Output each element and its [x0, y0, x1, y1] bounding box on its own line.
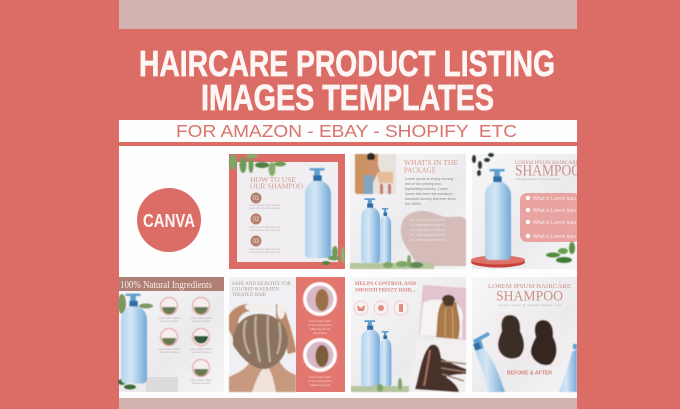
caption top: Lorem ipsum dolor — [309, 319, 331, 323]
photo: flowing hair — [414, 340, 466, 392]
ingredient captions: Lorem ipsum dolor — [158, 347, 180, 351]
heading — [488, 284, 571, 304]
blob text: 1x Lorem ipsum dolor sit — [410, 223, 445, 227]
leaves — [351, 378, 409, 392]
panel: how to use our shampoo — [229, 154, 345, 269]
bottom band — [119, 398, 577, 409]
caption top: adipiscing elit sed — [310, 327, 331, 331]
panel: safe and healthy — [229, 277, 345, 392]
photo — [355, 153, 396, 194]
heading: HOW TO USE — [250, 175, 296, 184]
bottle right — [559, 344, 577, 392]
panel: lorem ipsum shampoo: Lorem ipsum dolor sit amet consectetur — [515, 177, 561, 181]
caption top — [308, 319, 332, 335]
panel: lorem ipsum shampoo — [471, 153, 581, 269]
heading: SHAMPOO — [496, 288, 563, 304]
bottle left — [473, 332, 505, 392]
bottle — [121, 294, 147, 383]
leaves top left — [229, 154, 286, 176]
ingredient captions: sit amet consect — [160, 350, 179, 354]
caption: BEFORE & AFTER — [507, 370, 552, 376]
heading — [404, 158, 458, 174]
ingredient captions: sit amet consect — [192, 350, 211, 354]
body text — [405, 177, 456, 206]
body text: Lorem ipsum is simply dummy — [405, 177, 454, 181]
panel: what's in the package — [350, 153, 466, 269]
ingredient captions: Lorem ipsum dolor — [190, 347, 212, 351]
podium — [471, 256, 525, 268]
podium — [146, 377, 178, 392]
heading: SHAMPOO — [515, 162, 581, 180]
panel: lorem ipsum shampoo: What is Lorem Ipsu — [533, 234, 576, 240]
bottle — [305, 168, 331, 258]
body text: Ipsum has been the industry's — [405, 192, 453, 196]
heading: COLORED & KERATIN — [232, 288, 279, 292]
heading — [355, 281, 416, 294]
ingredient icons — [160, 298, 210, 376]
leaves top left — [472, 153, 494, 176]
blob text: 1x Lorem ipsum dolor sit — [410, 218, 445, 222]
heading — [250, 175, 304, 190]
caption bottom: sit amet consectetur — [308, 379, 332, 383]
bottle — [485, 169, 511, 260]
ingredient captions: Lorem ipsum dolor — [190, 316, 212, 320]
blob text: 1x Lorem ipsum dolor sit — [410, 238, 445, 242]
hair portrait top — [303, 282, 337, 316]
leaves — [350, 255, 434, 269]
subtitle strip — [119, 120, 577, 142]
heading — [232, 282, 292, 298]
panel: natural ingredients — [118, 277, 224, 392]
body text: standard dummy text ever since — [405, 197, 456, 201]
white template board — [119, 146, 577, 398]
blob text: 1x Lorem ipsum dolor sit — [410, 233, 445, 237]
steps — [249, 192, 281, 254]
panel: canva badge: CANVA — [143, 211, 195, 231]
subtitle strip: FOR AMAZON - EBAY - SHOPIFY ETC — [176, 121, 517, 141]
right margin — [577, 29, 680, 398]
hair after — [529, 317, 564, 367]
caption top: do eiusmod — [313, 331, 327, 335]
panel: helps control frizzy hair — [351, 277, 466, 392]
panel: lorem ipsum shampoo: What is Lorem Ipsu — [533, 208, 576, 214]
heading: HELPS CONTROL AND — [355, 281, 416, 287]
panel: canva badge — [137, 188, 201, 252]
steps: 01 — [253, 196, 260, 202]
title: HAIRCARE PRODUCT LISTING — [139, 43, 555, 84]
caption top: sit amet consectetur — [308, 323, 332, 327]
title: IMAGES TEMPLATES — [201, 77, 494, 118]
photo: washing hair — [229, 301, 296, 392]
heading: LOREM IPSUM HAIRCARE — [515, 160, 580, 166]
steps: Lorem ipsum dolor sit amet — [249, 206, 281, 210]
blob text — [410, 218, 445, 242]
heading: PACKAGE — [404, 166, 436, 174]
heading: OUR SHAMPOO — [250, 182, 304, 190]
panel: before and after — [472, 277, 577, 392]
heading: LOREM IPSUM HAIRCARE — [488, 284, 571, 290]
steps: Lorem ipsum dolor sit amet — [249, 228, 281, 232]
ingredient captions: sit amet consect — [192, 319, 211, 323]
steps: 02 — [253, 217, 260, 223]
leaves bottom right — [546, 242, 575, 263]
leaves — [118, 294, 153, 390]
panel: before and after: Lorem ipsum is simply dummy text — [498, 303, 561, 307]
caption bottom: adipiscing elit sed — [310, 383, 331, 387]
ingredient captions — [158, 316, 212, 385]
panel: lorem ipsum shampoo: What is Lorem Ipsu — [533, 196, 576, 202]
steps: Lorem ipsum dolor sit amet — [249, 225, 281, 229]
steps: Lorem ipsum dolor sit amet — [249, 203, 281, 207]
hair portrait bottom — [303, 338, 337, 372]
list panel — [520, 193, 580, 242]
body text: typesetting industry. Lorem — [405, 187, 448, 191]
top band — [119, 0, 577, 29]
steps: Lorem ipsum dolor sit amet — [249, 247, 281, 251]
body text: the 1500s. — [405, 202, 422, 206]
steps: 03 — [253, 239, 260, 245]
ingredient captions: Lorem ipsum dolor — [190, 378, 212, 382]
heading: SMOOTH FRIZZY HAIR... — [355, 288, 416, 294]
blob text: 1x Lorem ipsum dolor sit — [410, 228, 445, 232]
hair before — [496, 313, 527, 361]
badges — [354, 301, 408, 315]
bottles — [361, 198, 380, 263]
caption bottom: Lorem ipsum dolor — [309, 375, 331, 379]
photo: wavy hair — [419, 285, 466, 340]
caption bottom — [308, 375, 332, 387]
blob — [401, 211, 466, 266]
ingredient captions: sit amet consect — [160, 319, 179, 323]
heading: SAFE AND HEALTHY FOR — [232, 282, 292, 287]
title — [139, 43, 555, 118]
steps: Lorem ipsum dolor sit amet — [249, 250, 281, 254]
heading: WHAT'S IN THE — [404, 158, 458, 167]
bottles — [361, 320, 380, 387]
ingredient captions: sit amet consect — [192, 381, 211, 385]
heading: TREATED HAIR — [232, 293, 267, 298]
leaves bottom right — [322, 246, 345, 265]
panel: lorem ipsum shampoo: What is Lorem Ipsu — [533, 220, 576, 226]
body text: text of the printing and — [405, 182, 441, 186]
ingredient captions: Lorem ipsum dolor — [158, 316, 180, 320]
heading: 100% Natural Ingredients — [120, 280, 212, 291]
